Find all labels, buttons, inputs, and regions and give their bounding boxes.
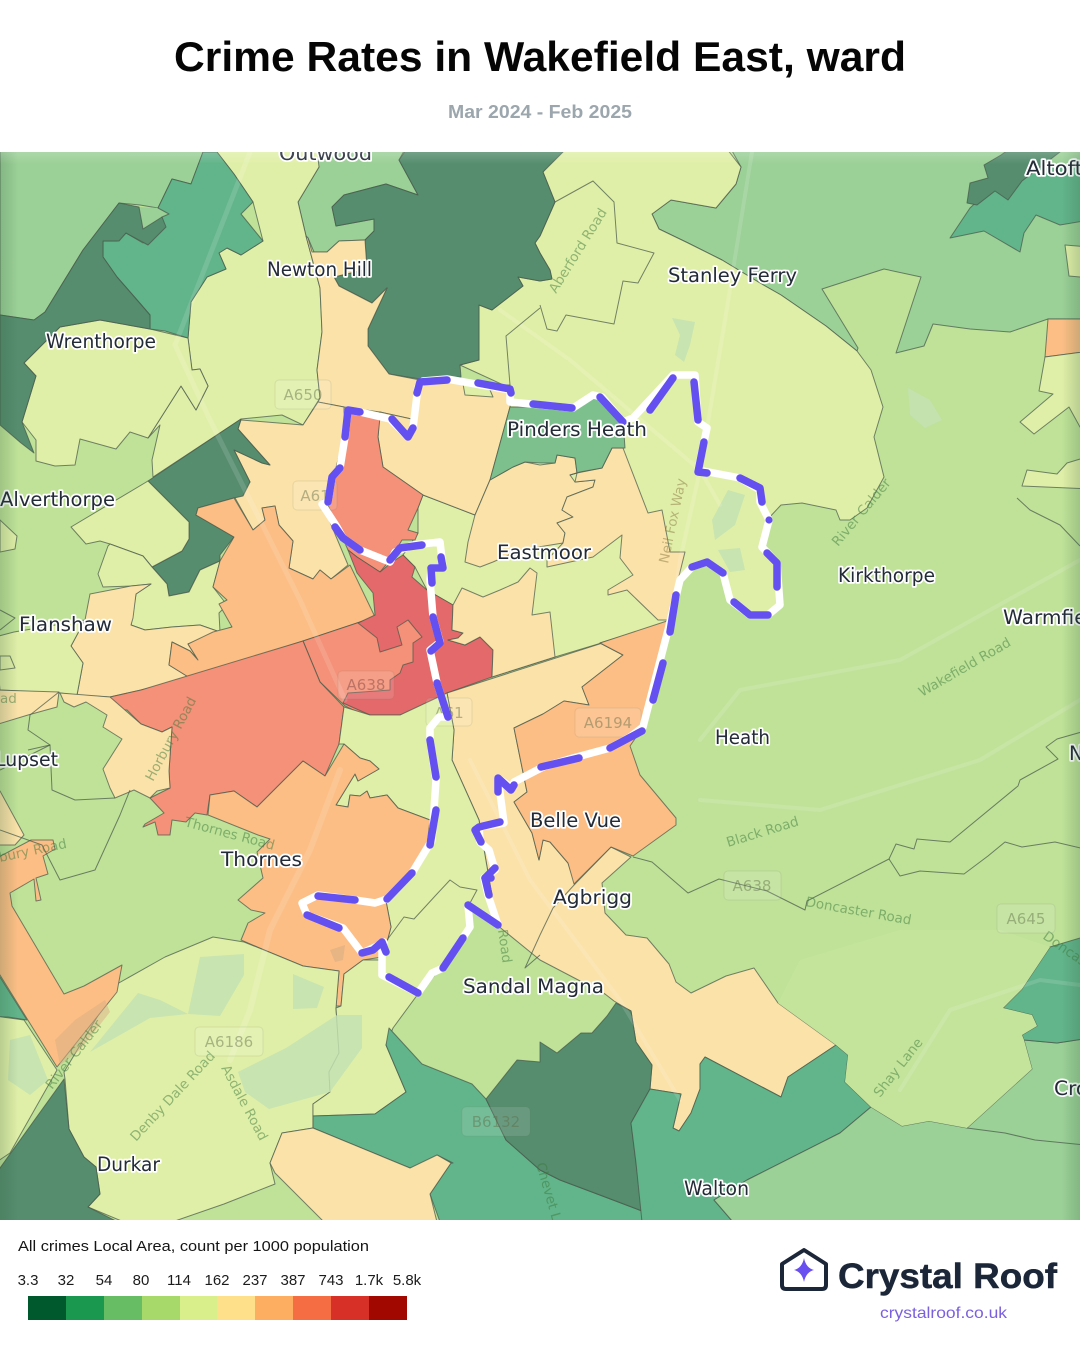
road name labels: ad: [0, 691, 17, 707]
legend scale values: [18, 1272, 422, 1289]
road name labels: Doncaster Road: [804, 894, 913, 929]
place name labels: [0, 142, 1080, 1200]
legend scale values: 387: [280, 1272, 306, 1289]
legend: [18, 1238, 422, 1320]
legend colour ramp: [28, 1296, 407, 1320]
place name labels: Durkar: [97, 1153, 161, 1176]
place name labels: Belle Vue: [530, 809, 621, 832]
lakes and parkland shading: [8, 318, 942, 1109]
road name labels: Aberford Road: [546, 206, 611, 296]
road network: [175, 152, 1080, 1100]
place name labels: Alverthorpe: [0, 488, 115, 511]
place name labels: Kirkthorpe: [838, 564, 935, 587]
legend scale values: 743: [318, 1272, 344, 1289]
ward boundary: Wakefield East: [302, 375, 780, 993]
road name labels: Thornes Road: [182, 814, 276, 854]
place name labels: Walton: [684, 1177, 749, 1200]
road name labels: Asdale Road: [217, 1062, 271, 1143]
road number shields: [195, 380, 1055, 1136]
place name labels: Thornes: [220, 848, 302, 871]
place name labels: Sandal Magna: [463, 975, 604, 998]
road name labels: Horbury Road: [142, 694, 200, 784]
road number shields: A61: [434, 704, 464, 722]
logo: Crystal Roof: [782, 1250, 1057, 1322]
road name labels: River Calder: [43, 1017, 107, 1092]
legend scale values: 5.8k: [393, 1272, 422, 1289]
road number shields: A6186: [205, 1033, 253, 1051]
road number shields: A6194: [584, 714, 632, 732]
logo url: crystalroof.co.uk: [880, 1305, 1008, 1322]
road number shields: A650: [284, 386, 322, 404]
road number shields: A61: [300, 487, 330, 505]
road name labels: Neil Fox Way: [656, 477, 690, 565]
place name labels: Outwood: [279, 142, 372, 165]
legend scale values: 237: [242, 1272, 268, 1289]
place name labels: Heath: [715, 726, 770, 749]
place name labels: Agbrigg: [553, 886, 632, 909]
place name labels: Flanshaw: [19, 613, 112, 636]
road name labels: River Calder: [829, 475, 895, 550]
road name labels: Black Road: [724, 814, 801, 851]
boundary lines: [0, 181, 1080, 1145]
road name labels: Shay Lane: [871, 1035, 926, 1100]
place name labels: Eastmoor: [497, 541, 592, 564]
road number shields: A645: [1007, 910, 1045, 928]
legend scale values: 80: [133, 1272, 149, 1289]
road number shields: A638: [733, 877, 771, 895]
legend scale values: 54: [96, 1272, 112, 1289]
legend scale values: 162: [204, 1272, 230, 1289]
legend scale values: 1.7k: [355, 1272, 384, 1289]
road name labels: Road: [494, 928, 515, 964]
road name labels: Wakefield Road: [916, 635, 1014, 700]
icon: house with star: [782, 1250, 826, 1289]
logo wordmark: Crystal Roof: [838, 1257, 1057, 1296]
legend scale values: 3.3: [18, 1272, 38, 1289]
road name labels: Chevet La: [532, 1161, 566, 1230]
road number shields: B6132: [472, 1113, 520, 1131]
title: Crime Rates in Wakefield East, ward: [174, 33, 906, 80]
legend scale values: 114: [167, 1272, 191, 1289]
place name labels: Newton Hill: [267, 258, 372, 281]
legend scale values: 32: [58, 1272, 74, 1289]
road number shields: A638: [347, 676, 385, 694]
place name labels: Wrenthorpe: [46, 330, 156, 353]
legend title: All crimes Local Area, count per 1000 population: [18, 1238, 369, 1255]
subtitle: date range: Mar 2024 - Feb 2025: [448, 102, 632, 122]
place name labels: Pinders Heath: [507, 418, 647, 441]
road name labels: [0, 206, 1080, 1230]
place name labels: Stanley Ferry: [668, 264, 797, 287]
road name labels: Denby Dale Road: [127, 1048, 219, 1145]
